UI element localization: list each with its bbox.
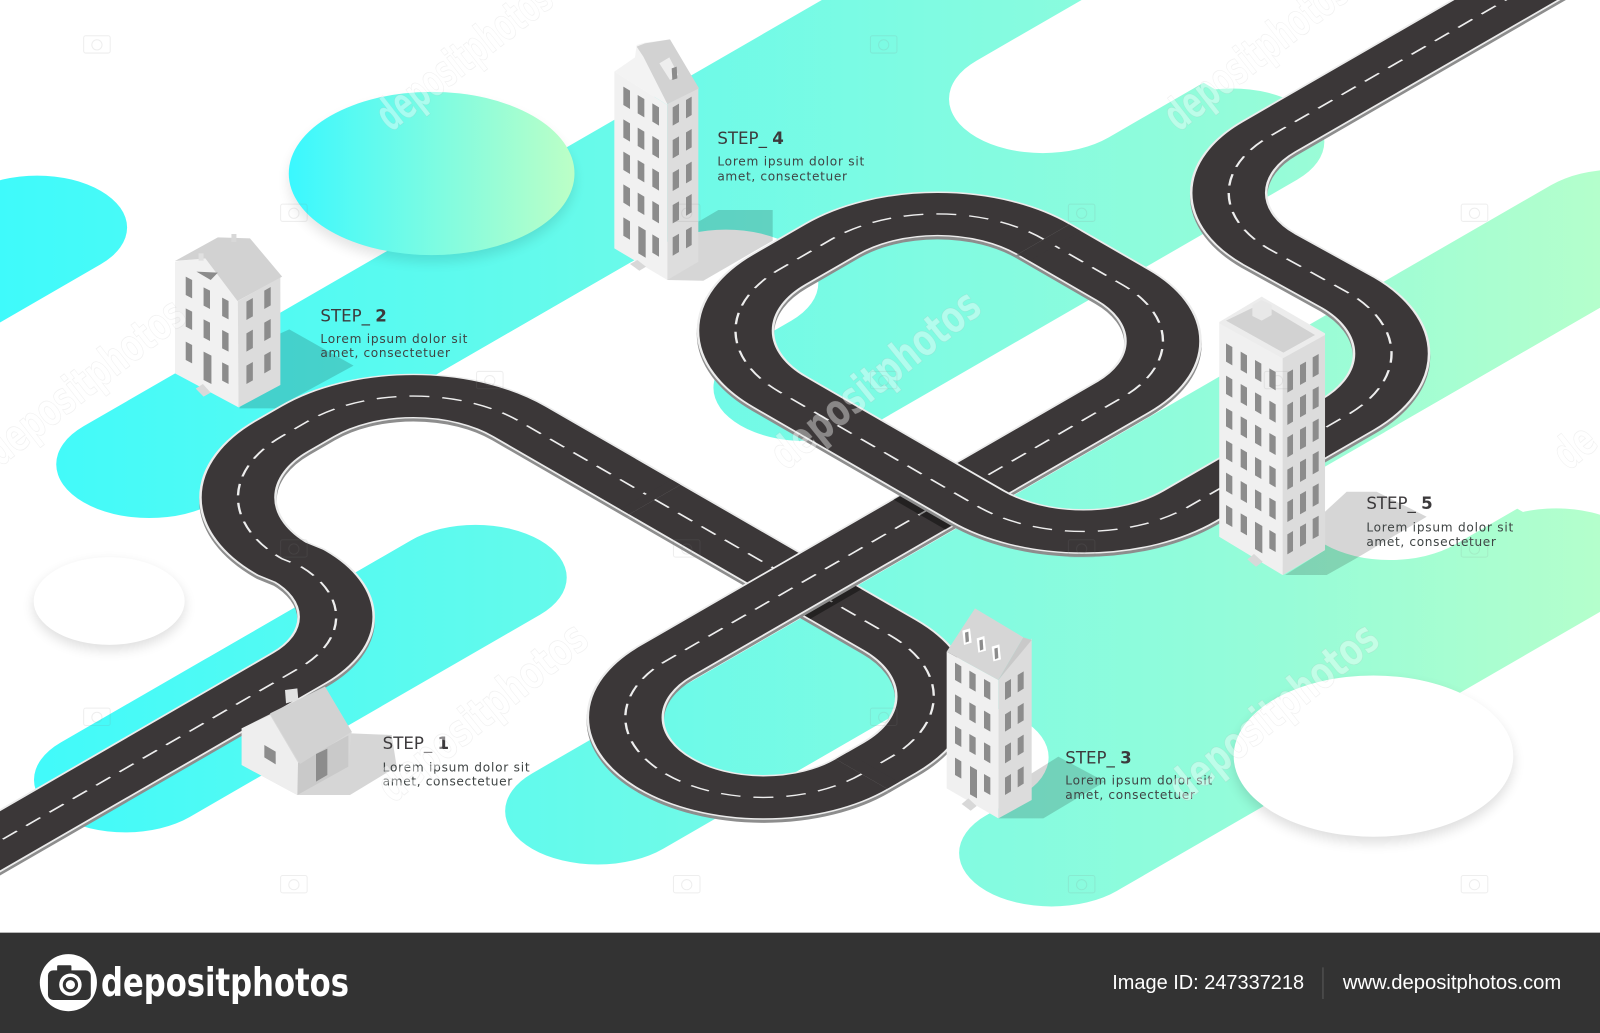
text: step 5 [1366,494,1513,549]
text: step 3: STEP_ 3 [1065,748,1132,768]
band: lower-left capsule [0,503,605,854]
band: middle capsule [467,147,1600,887]
building: step 4 tall house [614,39,699,280]
building: step 2 house [175,234,282,407]
text: step 2 [320,306,468,360]
text: step 2: Lorem ipsum dolor sit [320,332,468,346]
band: lower-right capsule [921,486,1600,929]
image id: Image ID: 247337218 [1112,972,1304,994]
icon: camera logo [40,954,97,1011]
text: step 3 [1065,748,1212,802]
building shadows [239,210,1427,818]
text: step 4: STEP_ 4 [717,129,784,149]
band: long upper capsule [18,0,1600,540]
text: step 5: amet, consectetuer [1366,535,1496,549]
watermark text: depositphotos [759,278,991,480]
watermark text [0,0,1600,813]
text: step 5: STEP_ 5 [1366,494,1433,514]
road section: entry and first loop [0,360,657,901]
building: step 5 tower [1219,297,1325,575]
watermark camera icons [84,36,1488,893]
website url: www.depositphotos.com [1342,972,1561,994]
text: step 4: amet, consectetuer [717,170,847,184]
band: central capsule [675,66,1363,463]
text: step 4: Lorem ipsum dolor sit [717,154,865,168]
building: step 3 townhouse [947,608,1032,818]
band: top-left capsule [0,154,164,518]
text: step 2: amet, consectetuer [320,346,450,360]
platform: large white ellipse [1234,676,1513,843]
band: central join [619,0,1219,347]
band: lower join [884,429,1524,798]
text: step 1: amet, consectetuer [383,775,512,789]
text: step 1 [383,734,530,789]
text: step 3: amet, consectetuer [1065,788,1195,802]
text: step 5: Lorem ipsum dolor sit [1366,521,1513,535]
watermark text: depositphotos [366,611,598,813]
text: step 3: Lorem ipsum dolor sit [1065,774,1212,788]
text: step 1: STEP_ 1 [383,734,449,754]
building: step 1 cottage [242,687,352,795]
logo wordmark: depositphotos [101,961,349,1006]
platform: small white ellipse [34,557,185,650]
road section: long straight and lower loop [509,480,1024,777]
watermark text: depositphotos [1157,611,1389,813]
road section: central crossing and upper loop [389,239,1418,834]
road section: exit towards top right [671,0,1600,570]
text: step 4 [717,129,865,184]
text: step 1: Lorem ipsum dolor sit [383,760,530,774]
platform: gradient ellipse [289,92,574,262]
footer bar [0,933,1600,1033]
text: step 2: STEP_ 2 [320,306,387,326]
